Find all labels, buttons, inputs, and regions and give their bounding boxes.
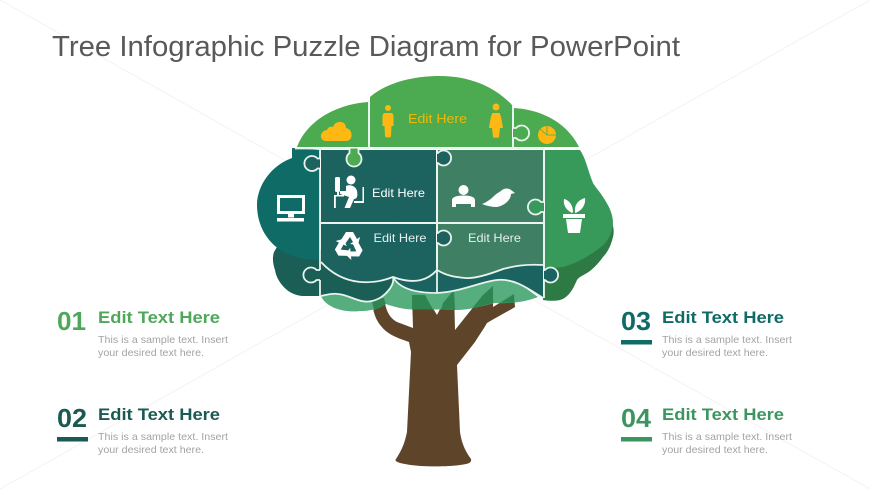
text block 04: 04 [621, 403, 652, 433]
label: upper left panel: Edit Here [372, 186, 425, 200]
label: lower right panel: Edit Here [468, 231, 521, 245]
text block 03: Edit Text Here [662, 308, 784, 327]
text block 01: This is a sample text. Insert [98, 334, 228, 346]
icon: recycle [331, 232, 365, 263]
connector tab: lower left [303, 268, 320, 282]
wave band left [321, 262, 393, 302]
left lower foliage [273, 242, 322, 296]
left cloud piece [257, 148, 320, 260]
icon: male figure [382, 105, 394, 138]
connector tab: top centre [513, 126, 529, 140]
text block 03: 03 [621, 306, 651, 336]
right cloud piece [545, 150, 613, 268]
label: lower left panel: Edit Here [374, 231, 427, 245]
text block 02: 02 [57, 403, 87, 433]
icon: potted plant [563, 198, 585, 233]
tree diagram [257, 76, 614, 466]
wave band centre [393, 265, 543, 298]
connector tab: top left [347, 148, 362, 166]
icon: person at desk [334, 176, 364, 208]
text block 03 [621, 306, 792, 359]
text block 03: This is a sample text. Insert [662, 334, 792, 346]
text block 03: your desired text here. [662, 347, 768, 359]
trunk seen through foliage [372, 286, 514, 310]
icon: computer [277, 195, 305, 222]
connector tab: centre lower [437, 230, 451, 246]
text block 04: your desired text here. [662, 444, 768, 456]
text block 01: your desired text here. [98, 347, 204, 359]
tree trunk [372, 286, 515, 466]
centre right lower panel [438, 224, 543, 278]
title: Tree Infographic Puzzle Diagram for PowerPoint [52, 31, 680, 63]
label: top piece: Edit Here [408, 111, 467, 126]
text block 02 [57, 403, 228, 456]
icon: person bust [452, 185, 475, 207]
connector tab: lower right [544, 268, 558, 282]
top right piece [514, 108, 579, 147]
icon: pie chart [538, 126, 556, 144]
connector tab: centre upper [437, 151, 451, 166]
text block 02: Edit Text Here [98, 405, 220, 424]
text block 02: your desired text here. [98, 444, 204, 456]
lower foliage band [321, 265, 538, 311]
icon: female figure [489, 104, 503, 138]
connector tab: left cloud [304, 156, 320, 171]
connector tab: right cloud [528, 200, 544, 214]
centre right upper panel [438, 150, 543, 222]
text block 01: Edit Text Here [98, 308, 220, 327]
icon: cloud [321, 122, 352, 141]
text block 01: 01 [57, 306, 86, 336]
text block 01 [57, 306, 228, 359]
icon: bird [482, 188, 515, 207]
centre left lower panel [321, 224, 436, 282]
text block 02: This is a sample text. Insert [98, 431, 228, 443]
text block 04: This is a sample text. Insert [662, 431, 792, 443]
right foliage shadow [543, 222, 614, 301]
top left piece [297, 102, 368, 147]
text block 04 [621, 403, 792, 456]
puzzle outlines [295, 100, 544, 302]
top centre piece [370, 76, 512, 147]
text block 04: Edit Text Here [662, 405, 784, 424]
centre left upper panel [321, 150, 436, 222]
